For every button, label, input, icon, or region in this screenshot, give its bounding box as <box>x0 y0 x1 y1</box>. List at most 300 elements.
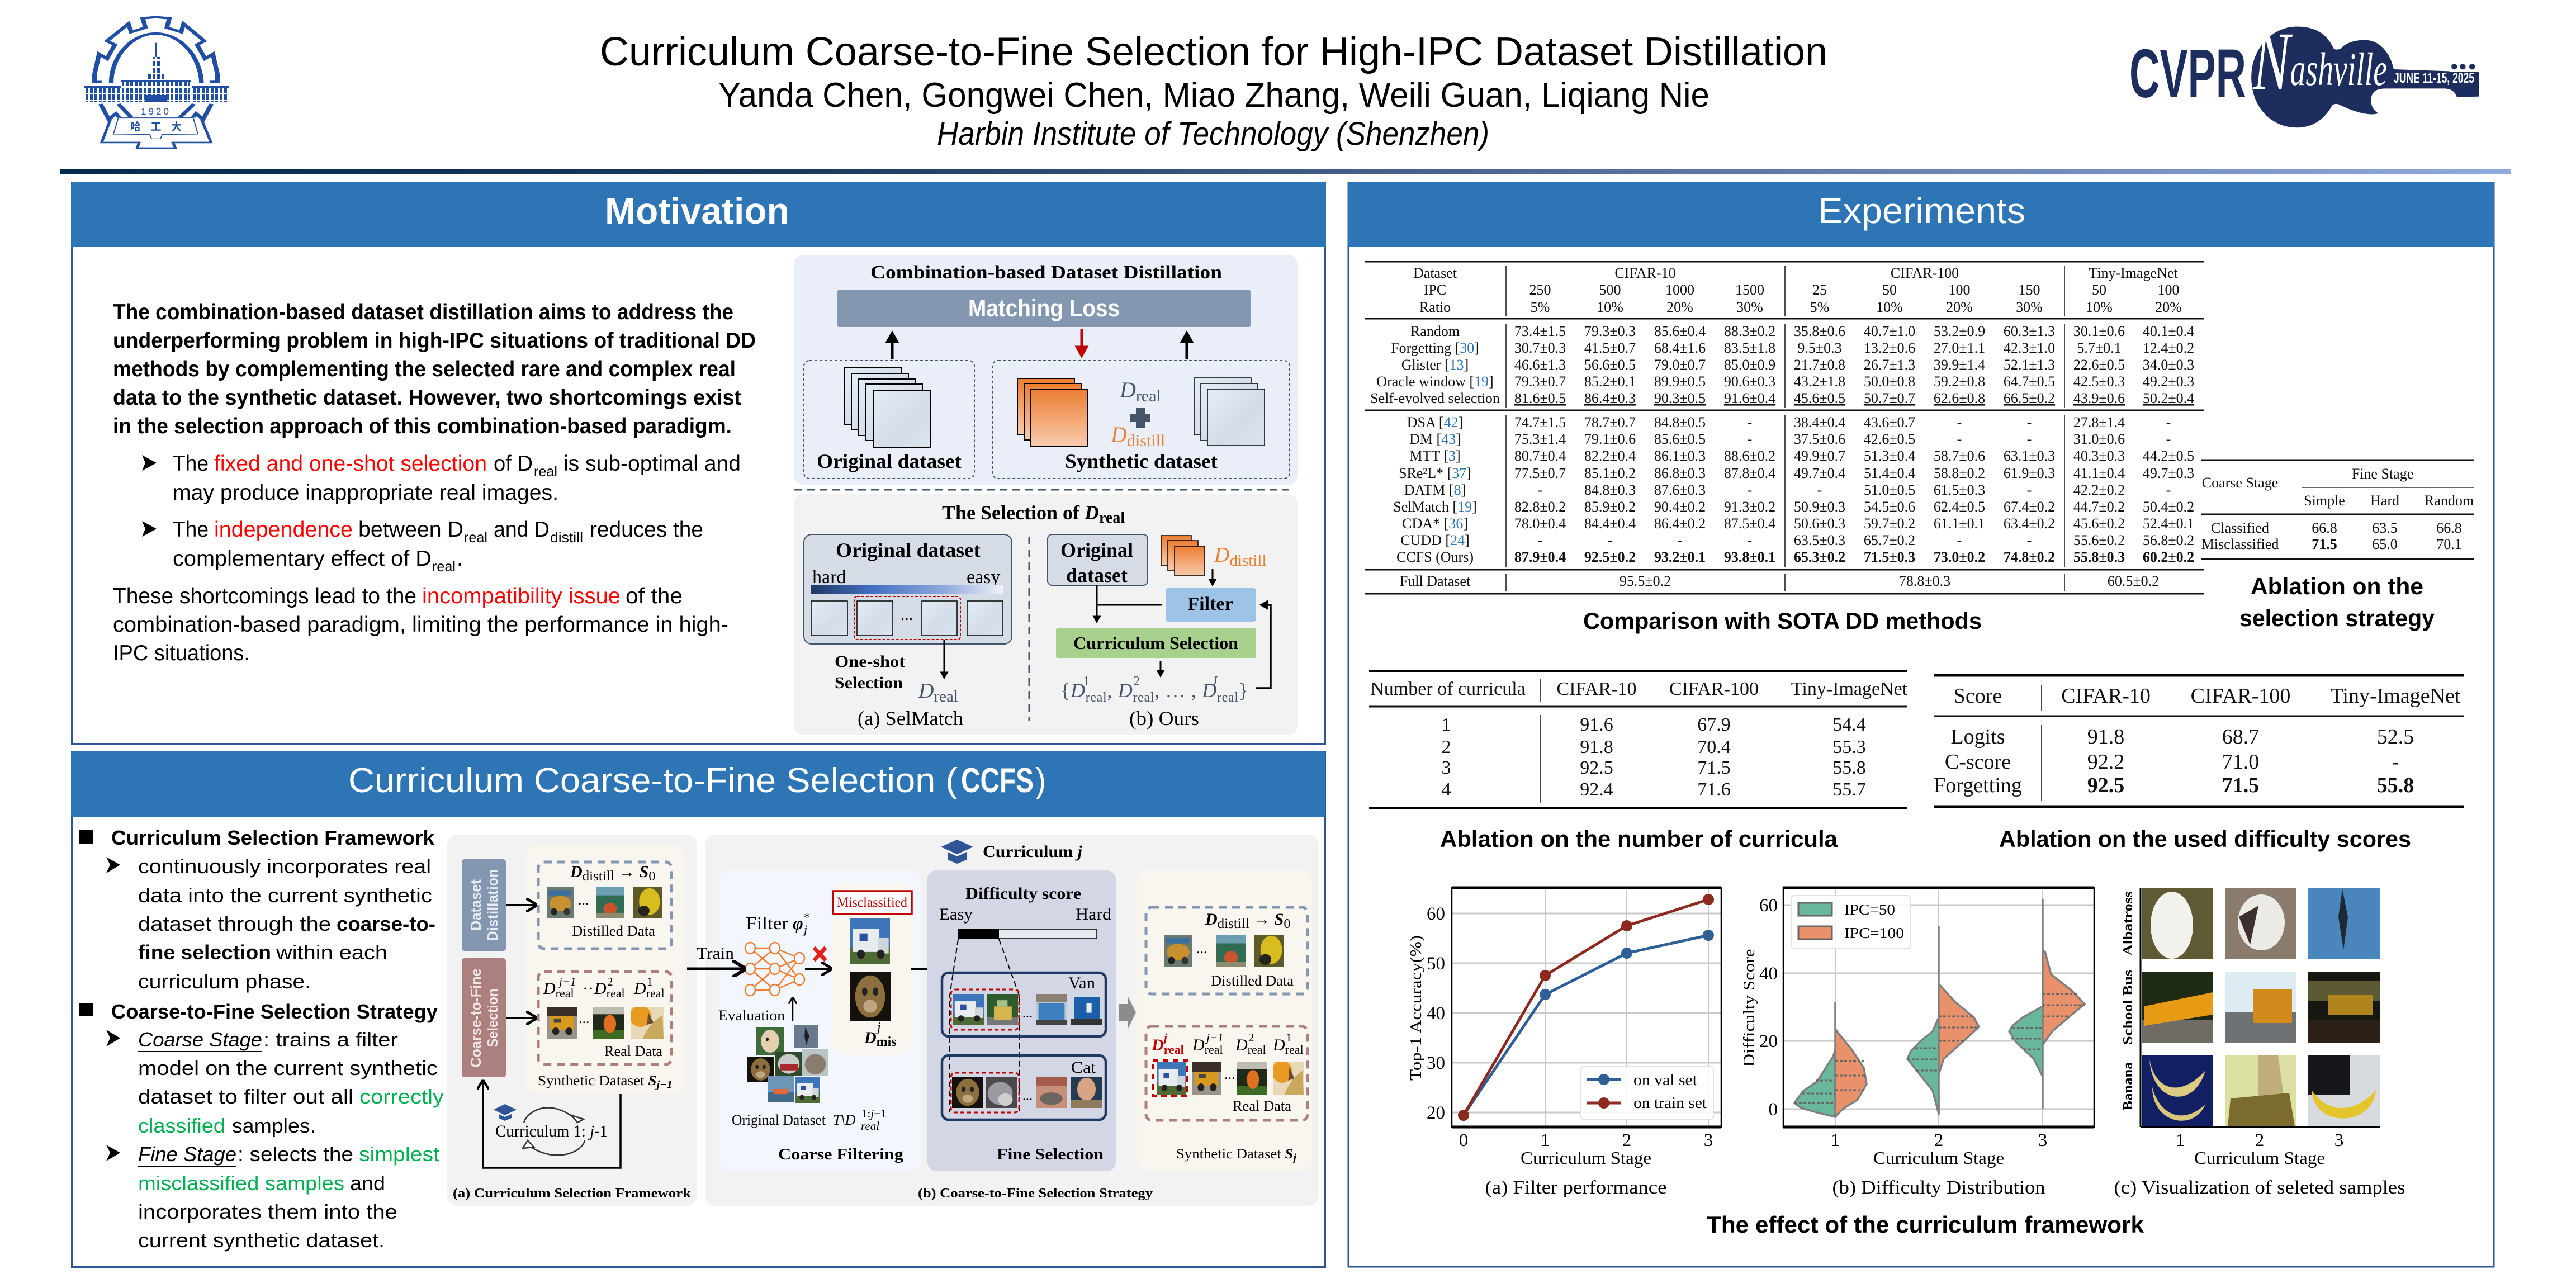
arrow: network to misclassified <box>805 968 830 970</box>
synthetic dataset card: real <box>556 986 574 1000</box>
result synthetic dataset card: j <box>1291 1152 1297 1164</box>
filter box <box>1166 588 1256 622</box>
SelMatch original dataset: Original dataset <box>836 539 981 561</box>
table: comparison with SOTA: 63.1±0.3 <box>2004 448 2055 464</box>
table: comparison with SOTA: 62.6±0.8 <box>1934 390 1985 406</box>
table: comparison with SOTA: - <box>2027 414 2032 430</box>
heading: selection strategy <box>2239 573 2435 631</box>
table: number of curricula: CIFAR-10 <box>1557 679 1636 699</box>
table: comparison with SOTA: 52.4±0.1 <box>2143 515 2194 532</box>
table: comparison with SOTA: 73.4±1.5 <box>1514 323 1566 339</box>
table: comparison with SOTA: 78.8±0.3 <box>1899 573 1950 589</box>
arrow: one-shot <box>944 640 945 678</box>
result synthetic dataset card: D <box>1192 1036 1205 1054</box>
icon: red cross <box>814 948 826 960</box>
table: number of curricula: 91.8 <box>1580 737 1613 757</box>
table: selection strategy: 63.5 <box>2372 520 2398 536</box>
table: comparison with SOTA: 87.5±0.4 <box>1724 515 1775 532</box>
table: comparison with SOTA: 55.6±0.2 <box>2073 532 2125 548</box>
heading: experiments: Experiments <box>1818 191 2025 231</box>
synthetic dataset card: Distilled Data <box>572 923 655 939</box>
bullet: independence: distill <box>550 529 583 546</box>
y ticks: 30 <box>1427 1053 1445 1073</box>
table: comparison with SOTA: IPC <box>1424 282 1446 298</box>
table: comparison with SOTA: 56.6±0.5 <box>1584 357 1636 373</box>
table: comparison with SOTA <box>1365 262 2204 594</box>
dataset distillation tag <box>462 859 506 951</box>
table: comparison with SOTA: 86.4±0.2 <box>1654 515 1706 532</box>
selected subsets formula: D <box>1118 679 1133 702</box>
text block: curriculum selection framework: within each <box>276 941 387 964</box>
bullet: fixed selection <box>142 452 741 505</box>
header rule <box>60 169 2511 174</box>
heading: number of curricula: Ablation on the number of curricula <box>1440 826 1838 852</box>
table: comparison with SOTA: - <box>1538 482 1542 498</box>
table: comparison with SOTA: 40.7±1.0 <box>1864 323 1915 339</box>
text block: coarse-to-fine selection strategy: correctly <box>359 1085 444 1108</box>
table: comparison with SOTA: 87.8±0.4 <box>1724 465 1775 481</box>
caption: (b) Difficulty Distribution <box>1832 1177 2045 1198</box>
bullet: independence: real <box>464 529 487 546</box>
series: on train set <box>1458 894 1714 1121</box>
y ticks: 60 <box>1427 904 1445 924</box>
table: difficulty scores: Forgetting <box>1934 774 2022 797</box>
filter label: φ <box>793 913 803 933</box>
table: comparison with SOTA: 86.1±0.3 <box>1654 448 1706 464</box>
text block: motivation summary: in the selection approach of this combination-based paradigm. <box>113 414 732 438</box>
table: comparison with SOTA: 65.3±0.2 <box>1794 549 1845 565</box>
text block: coarse-to-fine selection strategy: Coarse-to-Fine Selection Strategy <box>111 1000 438 1023</box>
table: number of curricula: CIFAR-100 <box>1669 679 1759 699</box>
table: selection strategy <box>2201 460 2474 559</box>
text block: coarse-to-fine selection strategy <box>79 1000 444 1252</box>
bullet: independence: reduces the <box>590 518 703 542</box>
bullet: independence: between D <box>358 518 463 542</box>
table: comparison with SOTA: 13.2±0.6 <box>1864 340 1915 356</box>
table: comparison with SOTA: 26.7±1.3 <box>1864 357 1915 373</box>
table: comparison with SOTA: 74.7±1.5 <box>1514 414 1566 430</box>
table: comparison with SOTA: 20% <box>1946 299 1973 315</box>
table: number of curricula: 54.4 <box>1832 714 1866 735</box>
table: comparison with SOTA: 37.5±0.6 <box>1794 431 1845 447</box>
table: comparison with SOTA: 1000 <box>1665 282 1694 298</box>
table: comparison with SOTA: - <box>1608 532 1612 548</box>
row labels: School Bus <box>2121 970 2135 1045</box>
cat class: Cat <box>1071 1058 1096 1077</box>
x axis label: Curriculum Stage <box>1873 1148 2004 1168</box>
text block: coarse-to-fine selection strategy: classified <box>138 1114 225 1137</box>
original dataset box: Original dataset <box>817 450 962 472</box>
table: comparison with SOTA: 54.5±0.6 <box>1864 499 1915 515</box>
table: comparison with SOTA: 43.6±0.7 <box>1864 414 1915 430</box>
bullet: independence: The <box>173 518 209 542</box>
fine selection caption: Fine Selection <box>997 1146 1104 1163</box>
connector: filter to branch <box>1097 604 1162 606</box>
original dataset label: 1:j−1 <box>861 1107 887 1120</box>
x ticks: 2 <box>2255 1130 2264 1150</box>
table: comparison with SOTA: 25 <box>1812 282 1827 298</box>
table: comparison with SOTA: DSA [42] <box>1407 414 1463 430</box>
result synthetic dataset card: 1 <box>1286 1031 1291 1044</box>
table: comparison with SOTA: - <box>2027 532 2032 548</box>
y ticks: 20 <box>1759 1031 1778 1052</box>
table: comparison with SOTA: 12.4±0.2 <box>2143 340 2194 356</box>
difficulty bar <box>958 929 1097 939</box>
table: comparison with SOTA: 42.3±1.0 <box>2004 340 2055 356</box>
table: comparison with SOTA: 85.9±0.2 <box>1584 499 1636 515</box>
y axis label: Top-1 Accuracy(%) <box>1408 935 1425 1081</box>
table: comparison with SOTA: 74.8±0.2 <box>2004 549 2055 565</box>
table: comparison with SOTA: 38.4±0.4 <box>1794 414 1845 430</box>
synthetic dataset card: Synthetic Dataset S <box>538 1073 656 1088</box>
cat class: ... <box>1022 1089 1033 1104</box>
text block: motivation summary: underperforming problem in high-IPC situations of traditional DD <box>113 329 756 353</box>
text block: curriculum selection framework: continuously incorporates real <box>138 855 431 878</box>
table: difficulty scores: - <box>2392 750 2399 774</box>
ours: original dataset box <box>1048 534 1148 586</box>
dataset distillation tag: Distillation <box>484 869 501 941</box>
table: comparison with SOTA: 20% <box>1666 299 1693 315</box>
result synthetic dataset card <box>1137 870 1312 1171</box>
table: comparison with SOTA: 50.7±0.7 <box>1864 390 1915 406</box>
SelMatch original dataset: hard <box>812 567 846 588</box>
table: comparison with SOTA: CCFS (Ours) <box>1396 549 1474 565</box>
van class: Van <box>1068 974 1095 992</box>
result synthetic dataset card: D <box>1273 1036 1285 1054</box>
table: comparison with SOTA: 91.6±0.4 <box>1724 390 1775 406</box>
x ticks <box>1831 1130 2047 1150</box>
table: number of curricula: 3 <box>1441 757 1451 778</box>
table: comparison with SOTA: 50 <box>2092 282 2106 298</box>
table: comparison with SOTA: 59.2±0.8 <box>1934 373 1985 390</box>
bullet: independence: and D <box>494 518 550 542</box>
result synthetic dataset card: real <box>1285 1043 1304 1057</box>
line chart: filter performance <box>1408 888 1721 1198</box>
original dataset label: T\D <box>833 1112 856 1128</box>
table: comparison with SOTA: Glister [13] <box>1401 357 1469 373</box>
x ticks <box>2176 1130 2343 1150</box>
table: number of curricula: 1 <box>1441 714 1451 735</box>
arrow: selection to data <box>506 1017 535 1019</box>
table: comparison with SOTA: 49.2±0.3 <box>2143 373 2194 390</box>
table: comparison with SOTA: 40.3±0.3 <box>2073 448 2125 464</box>
table: comparison with SOTA: 78.0±0.4 <box>1514 515 1566 532</box>
legend: on val set <box>1633 1072 1697 1089</box>
table: comparison with SOTA: 49.7±0.4 <box>1794 465 1845 481</box>
table: comparison with SOTA: 42.2±0.2 <box>2073 482 2125 498</box>
coarse filtering caption: Coarse Filtering <box>778 1146 903 1163</box>
one-shot selection label: One-shot <box>835 652 905 671</box>
D real output: D <box>918 679 934 703</box>
table: comparison with SOTA: 85.1±0.2 <box>1584 465 1636 481</box>
table: difficulty scores: CIFAR-10 <box>2061 684 2151 708</box>
legend <box>1792 896 1910 949</box>
table: comparison with SOTA: 500 <box>1599 282 1621 298</box>
text block: conclusion: These shortcomings lead to the <box>113 584 416 608</box>
synthetic dataset box: D <box>1111 422 1127 447</box>
synthetic dataset card: Real Data <box>604 1043 662 1059</box>
loop arrow <box>483 1082 621 1168</box>
selected subsets formula: , … , <box>1154 679 1196 702</box>
bullet: fixed selection: fixed and one-shot selection <box>214 452 487 476</box>
arrow: dataset to selection <box>1096 585 1098 622</box>
heading: selection strategy: selection strategy <box>2239 605 2435 631</box>
table: number of curricula: Tiny-ImageNet <box>1791 679 1908 699</box>
text block: coarse-to-fine selection strategy: model on the current synthetic <box>138 1057 438 1079</box>
table: comparison with SOTA: 45.6±0.2 <box>2073 515 2125 532</box>
heading: CCFS <box>71 751 1325 817</box>
x ticks: 3 <box>2038 1130 2047 1150</box>
table: comparison with SOTA: 71.5±0.3 <box>1864 549 1915 565</box>
synthetic dataset card: 0 <box>648 869 655 884</box>
table: number of curricula <box>1369 671 1908 808</box>
table: number of curricula: 55.7 <box>1832 779 1866 800</box>
table: selection strategy: 66.8 <box>2312 520 2337 536</box>
table: selection strategy: Simple <box>2304 493 2345 509</box>
selected subsets formula: D <box>1202 679 1216 702</box>
table: comparison with SOTA: 20% <box>2155 299 2182 315</box>
table: comparison with SOTA: 68.4±1.6 <box>1654 340 1706 356</box>
bullet: independence: complementary effect of D <box>173 547 432 571</box>
table: comparison with SOTA: 84.4±0.4 <box>1584 515 1636 532</box>
table: number of curricula: 71.6 <box>1697 779 1731 800</box>
bullet: fixed selection: is sub-optimal and <box>564 452 741 476</box>
table: comparison with SOTA: 85.6±0.4 <box>1654 323 1706 339</box>
synthetic dataset card: ... <box>579 1010 589 1026</box>
table: selection strategy: 71.5 <box>2312 536 2337 552</box>
table: comparison with SOTA: 82.2±0.4 <box>1584 448 1636 464</box>
table: comparison with SOTA: MTT [3] <box>1409 448 1461 464</box>
table: comparison with SOTA: 88.3±0.2 <box>1724 323 1775 339</box>
result synthetic dataset card: distill <box>1218 916 1249 931</box>
table: difficulty scores <box>1934 675 2464 807</box>
table: comparison with SOTA: 66.5±0.2 <box>2004 390 2055 406</box>
table: comparison with SOTA: 55.8±0.3 <box>2073 549 2125 565</box>
table: comparison with SOTA: Oracle window [19] <box>1376 373 1494 390</box>
table: number of curricula: 70.4 <box>1697 737 1731 757</box>
table: comparison with SOTA: 79.0±0.7 <box>1654 357 1706 373</box>
synthetic dataset card: D <box>594 979 607 998</box>
original dataset label <box>732 1107 887 1133</box>
x ticks: 3 <box>2334 1130 2343 1150</box>
text block: curriculum selection framework: coarse-to- <box>337 912 435 935</box>
table: comparison with SOTA: DM [43] <box>1409 431 1461 447</box>
coarse filtering panel <box>718 870 921 1171</box>
table: comparison with SOTA: 44.7±0.2 <box>2073 499 2125 515</box>
table: selection strategy: Hard <box>2370 493 2399 509</box>
synthetic dataset box: D <box>1120 377 1136 402</box>
table: difficulty scores: 91.8 <box>2087 725 2124 749</box>
curriculum j heading: Curriculum j <box>983 842 1083 861</box>
row labels: Banana <box>2121 1062 2135 1110</box>
table: comparison with SOTA: SRe²L* [37] <box>1399 465 1471 481</box>
heading: CCFS: CCFS <box>961 761 1034 800</box>
table: comparison with SOTA: 67.4±0.2 <box>2004 499 2055 515</box>
synthetic dataset card: j−1 <box>557 975 576 988</box>
dataset distillation tag: Dataset <box>467 879 484 931</box>
evaluation arrow: Evaluation <box>718 1007 785 1024</box>
diagram: combination-based dataset distillation <box>794 255 1298 485</box>
original dataset label: Original Dataset <box>732 1112 826 1128</box>
row: school bus <box>2142 972 2380 1043</box>
result synthetic dataset card: D <box>1205 910 1218 929</box>
ours: distilled stack: D <box>1214 543 1229 567</box>
table: comparison with SOTA: 61.9±0.3 <box>2004 465 2055 481</box>
y ticks: 50 <box>1427 954 1445 974</box>
row labels: Albatross <box>2121 891 2135 956</box>
legend: IPC=100 <box>1844 925 1904 941</box>
table: number of curricula: 67.9 <box>1697 714 1731 735</box>
table: comparison with SOTA: 50.4±0.2 <box>2143 499 2194 515</box>
result synthetic dataset card: real <box>1248 1043 1266 1057</box>
table: comparison with SOTA: 85.6±0.5 <box>1654 431 1706 447</box>
institution: Harbin Institute of Technology (Shenzhen) <box>937 116 1489 152</box>
caption: SelMatch: (a) SelMatch <box>858 707 963 730</box>
table: difficulty scores: Logits <box>1950 725 2005 749</box>
misclassified card: mis <box>877 1035 897 1049</box>
synthetic dataset box: Synthetic dataset <box>1065 450 1218 472</box>
table: comparison with SOTA: 58.8±0.2 <box>1934 465 1985 481</box>
result synthetic dataset card: Synthetic Dataset S <box>1176 1147 1292 1162</box>
misclassified card: D <box>864 1029 877 1047</box>
arrow: synthetic to loss <box>1185 333 1188 359</box>
fine selection panel <box>927 870 1116 1171</box>
arrow: feedback loop <box>1256 605 1271 688</box>
result synthetic dataset card: real <box>1164 1043 1184 1057</box>
table: difficulty scores: Score <box>1954 684 2002 708</box>
result synthetic dataset card: → <box>1249 910 1275 929</box>
text block: coarse-to-fine selection strategy: : selects the <box>238 1143 353 1166</box>
row labels <box>2121 891 2135 1110</box>
table: comparison with SOTA: - <box>1538 532 1542 548</box>
bullet: fixed selection: of D <box>494 452 533 476</box>
selected subsets formula: } <box>1239 679 1248 702</box>
panel: experiments <box>1348 182 2494 1267</box>
superscripts: 1 <box>1083 674 1090 689</box>
text block: coarse-to-fine selection strategy: misclassified samples <box>138 1172 344 1195</box>
bullet: independence: real <box>432 558 456 575</box>
bullet: independence <box>142 518 703 575</box>
founding year: 1920 <box>141 106 171 117</box>
table: comparison with SOTA: 86.8±0.3 <box>1654 465 1706 481</box>
table: comparison with SOTA: 60.3±1.3 <box>2004 323 2055 339</box>
table: number of curricula: 55.8 <box>1832 757 1866 778</box>
table: comparison with SOTA: 51.0±0.5 <box>1864 482 1915 498</box>
table: comparison with SOTA: 10% <box>1876 299 1903 315</box>
legend <box>1581 1067 1713 1119</box>
text block: motivation summary: methods by complementing the selected rare and complex real <box>113 357 736 381</box>
synthetic dataset card: → <box>614 863 640 881</box>
table: comparison with SOTA: 34.0±0.3 <box>2143 357 2194 373</box>
table: comparison with SOTA: 250 <box>1530 282 1551 298</box>
table: selection strategy: Fine Stage <box>2352 466 2413 482</box>
table: comparison with SOTA: CIFAR-100 <box>1891 265 1959 281</box>
synthetic dataset card: 2 <box>607 975 613 988</box>
table: comparison with SOTA: CUDD [24] <box>1400 532 1470 548</box>
synthetic dataset card: j−1 <box>655 1079 673 1091</box>
table: comparison with SOTA: 100 <box>1949 282 1970 298</box>
table: comparison with SOTA: - <box>1817 482 1822 498</box>
university short name: 哈工大 <box>130 121 182 133</box>
table: comparison with SOTA: 45.6±0.5 <box>1794 390 1845 406</box>
x ticks: 2 <box>1622 1130 1631 1150</box>
table: comparison with SOTA: Ratio <box>1419 299 1451 315</box>
table: comparison with SOTA: 63.5±0.3 <box>1794 532 1845 548</box>
curriculum selection box: Curriculum Selection <box>1073 633 1238 653</box>
table: comparison with SOTA: CDA* [36] <box>1402 515 1468 532</box>
text block: curriculum selection framework: curriculum phase. <box>138 970 311 993</box>
table: comparison with SOTA: 50 <box>1882 282 1897 298</box>
table: comparison with SOTA: 63.4±0.2 <box>2004 515 2055 532</box>
table: comparison with SOTA: 88.6±0.2 <box>1724 448 1775 464</box>
matching loss bar <box>837 290 1251 327</box>
text block: curriculum selection framework: data into the current synthetic <box>138 884 432 907</box>
table: comparison with SOTA: 65.7±0.2 <box>1864 532 1915 548</box>
text block: coarse-to-fine selection strategy: samples. <box>232 1114 316 1137</box>
table: comparison with SOTA: 61.5±0.3 <box>1934 482 1985 498</box>
violin: stage 2 <box>1907 926 1979 1115</box>
SelMatch original dataset <box>804 534 1012 644</box>
synthetic dataset box: real <box>1136 387 1161 405</box>
panel: CCFS <box>71 751 1325 1267</box>
synthetic dataset card: 1 <box>647 975 653 988</box>
table: difficulty scores: 71.0 <box>2222 750 2259 774</box>
table: comparison with SOTA: 10% <box>1597 299 1623 315</box>
superscripts: J <box>1211 674 1218 689</box>
table: comparison with SOTA: 50.6±0.3 <box>1794 515 1845 532</box>
table: comparison with SOTA: - <box>2166 482 2171 498</box>
table: comparison with SOTA: 49.7±0.3 <box>2143 465 2194 481</box>
evaluation arrow <box>718 998 793 1024</box>
table: comparison with SOTA: 50.9±0.3 <box>1794 499 1845 515</box>
table: comparison with SOTA: 83.5±1.8 <box>1724 340 1775 356</box>
table: comparison with SOTA: 51.3±0.4 <box>1864 448 1915 464</box>
table: comparison with SOTA: 41.5±0.7 <box>1584 340 1636 356</box>
coarse-to-fine selection tag: Selection <box>484 988 501 1048</box>
table: comparison with SOTA: - <box>1957 414 1962 430</box>
table: comparison with SOTA: 35.8±0.6 <box>1794 323 1845 339</box>
table: comparison with SOTA: 40.1±0.4 <box>2143 323 2194 339</box>
coarse-to-fine selection tag: Coarse-to-Fine <box>467 968 484 1068</box>
table: comparison with SOTA: 64.7±0.5 <box>2004 373 2055 390</box>
table: comparison with SOTA: 85.2±0.1 <box>1584 373 1636 390</box>
text block: conclusion: of the <box>626 584 683 608</box>
heading: difficulty scores: Ablation on the used difficulty scores <box>1999 826 2411 852</box>
table: comparison with SOTA: Self-evolved selection <box>1370 390 1500 406</box>
result synthetic dataset card: Real Data <box>1233 1098 1291 1114</box>
bullet: fixed selection: The <box>173 452 209 476</box>
table: comparison with SOTA: 95.5±0.2 <box>1620 573 1671 589</box>
table: selection strategy: Random <box>2425 493 2474 509</box>
arrow: grey block <box>1119 996 1136 1030</box>
text block: coarse-to-fine selection strategy: Coarse Stage <box>138 1028 262 1051</box>
table: comparison with SOTA: CIFAR-10 <box>1614 265 1676 281</box>
table: comparison with SOTA: - <box>1748 482 1752 498</box>
logo: CVPR Nashville: CVPR <box>2129 36 2246 112</box>
arrow: train: Train <box>697 944 734 963</box>
one-shot selection label: Selection <box>835 674 903 692</box>
table: comparison with SOTA: Random <box>1410 323 1460 339</box>
synthetic dataset card: S <box>640 863 648 881</box>
synthetic dataset card: distill <box>583 869 614 884</box>
caption: (a) Filter performance <box>1485 1177 1667 1198</box>
table: comparison with SOTA: 86.4±0.3 <box>1584 390 1636 406</box>
text block: coarse-to-fine selection strategy: dataset to filter out all <box>138 1085 353 1108</box>
table: difficulty scores: 92.5 <box>2087 774 2124 797</box>
text block: conclusion: combination-based paradigm, limiting the performance in high- <box>113 613 728 637</box>
table: comparison with SOTA: 46.6±1.3 <box>1514 357 1566 373</box>
table: comparison with SOTA: DATM [8] <box>1404 482 1466 498</box>
